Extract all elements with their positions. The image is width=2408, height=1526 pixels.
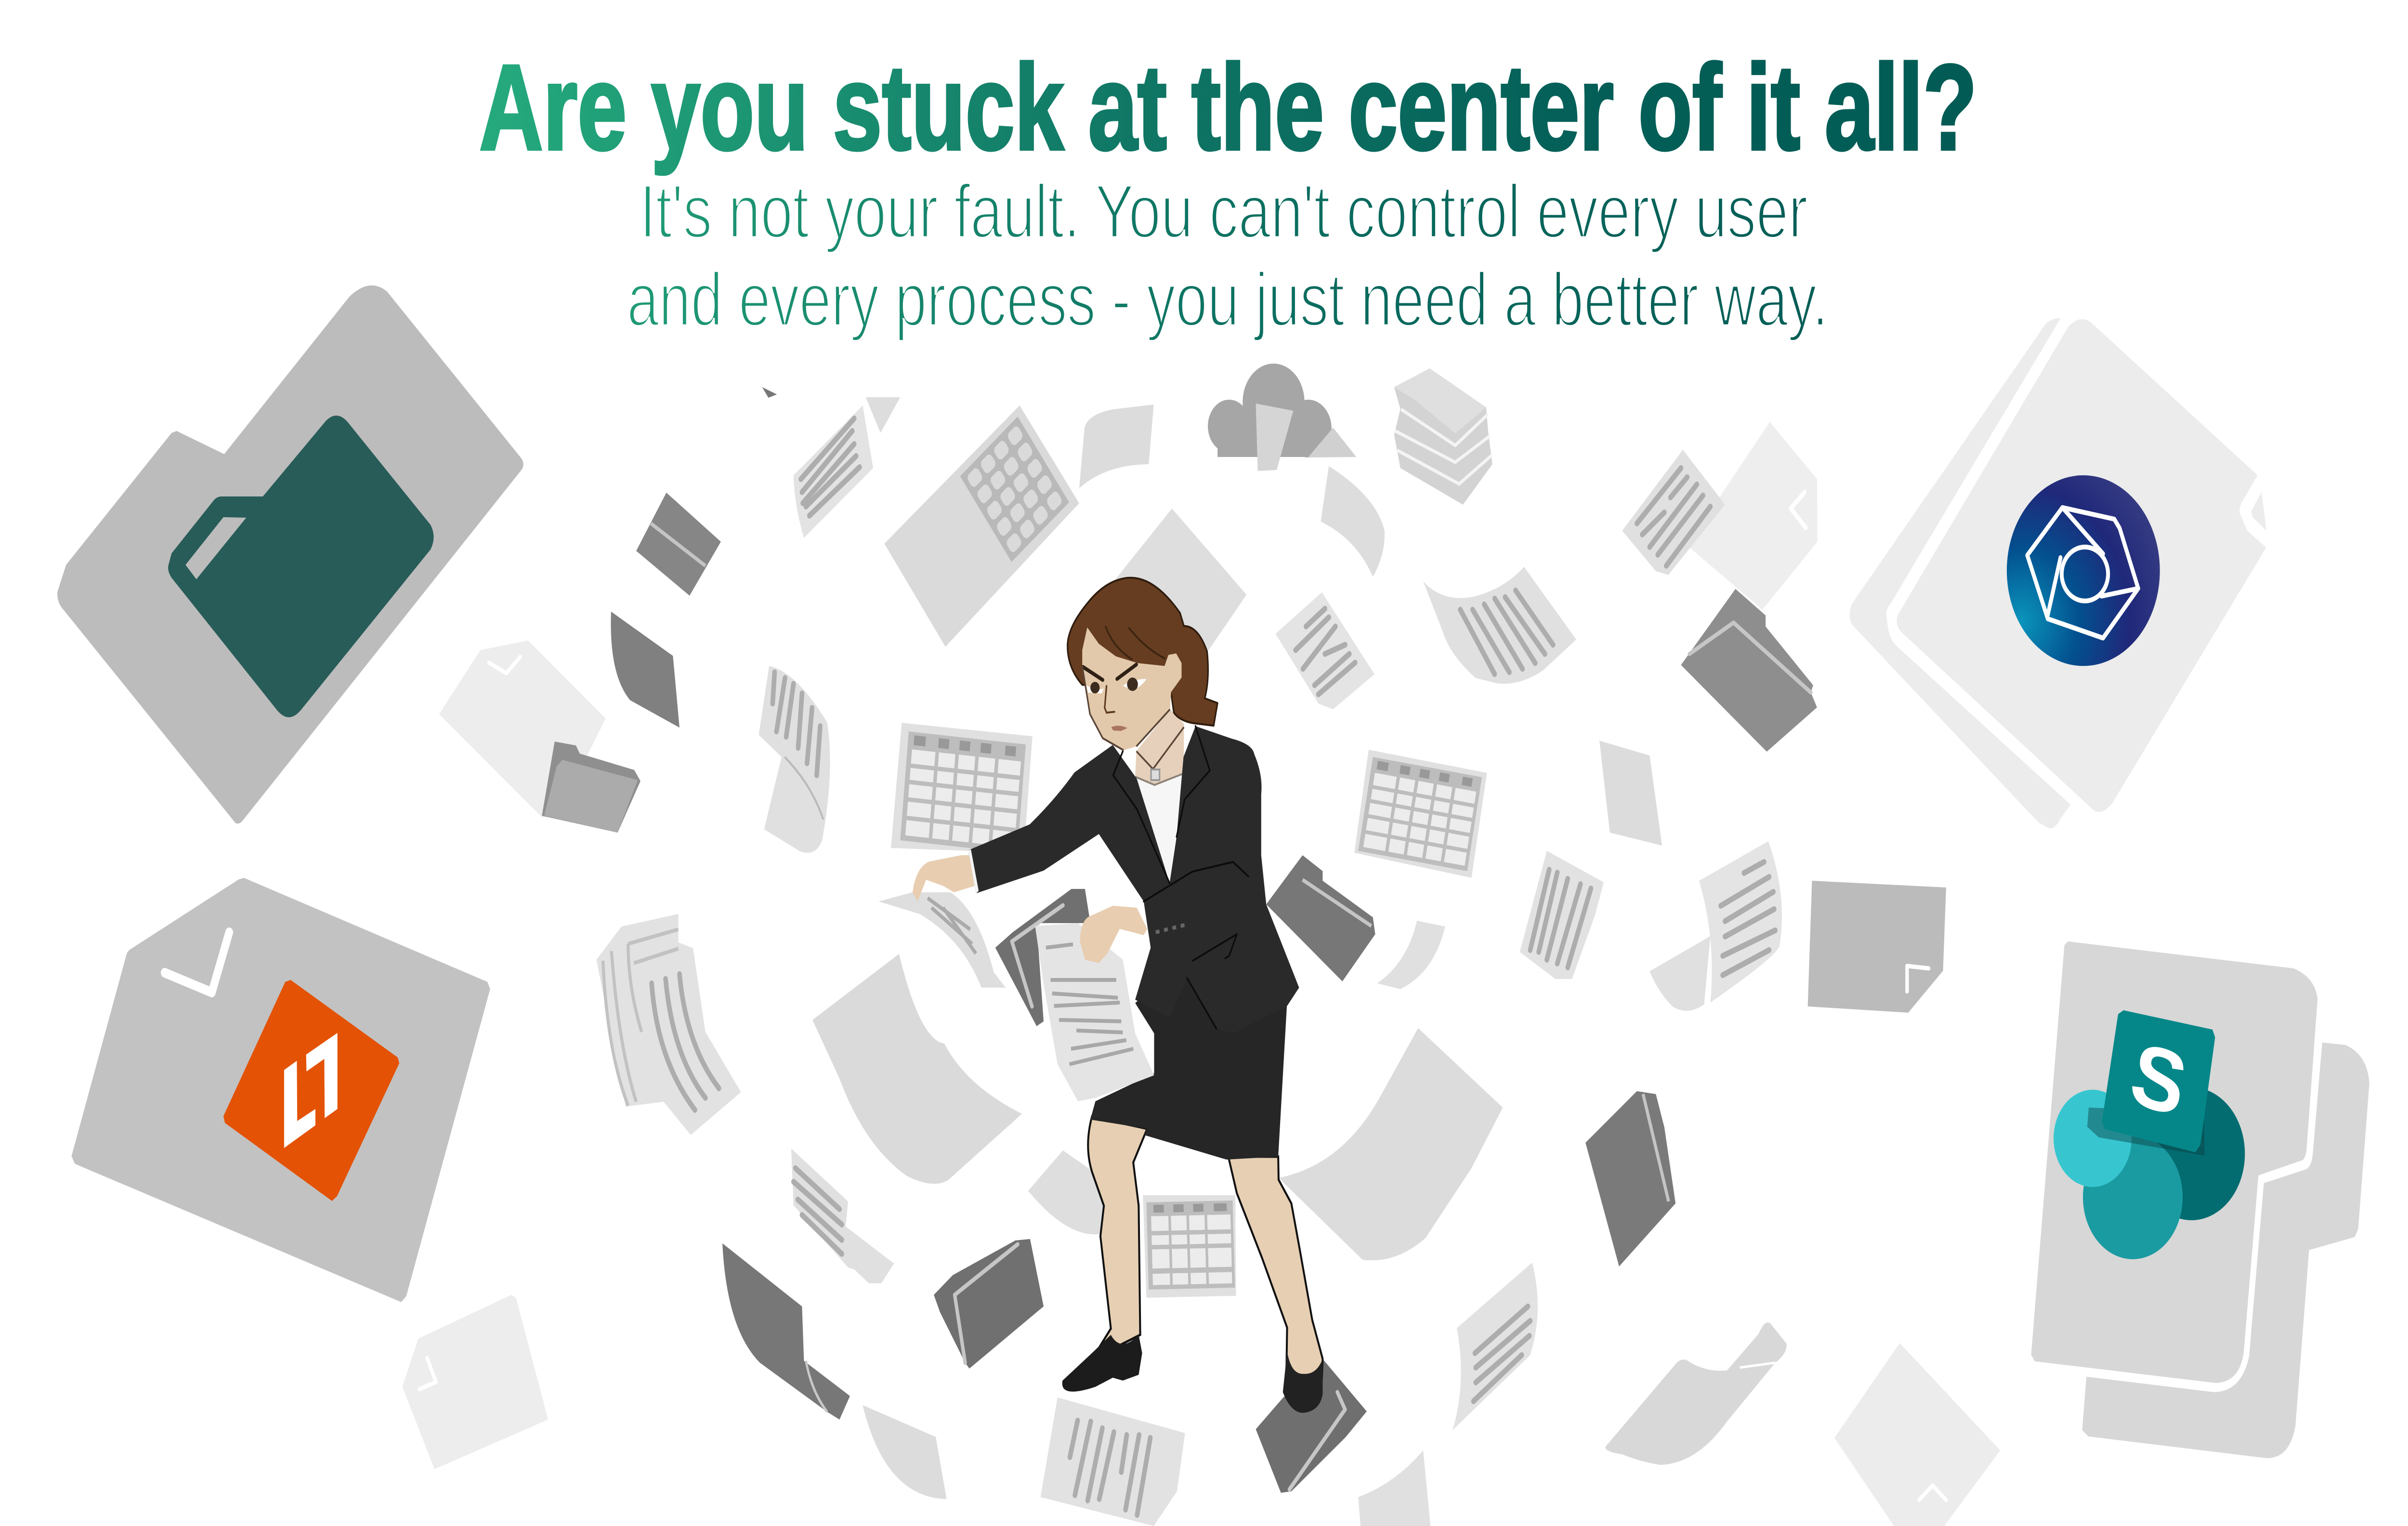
character: shoes <box>1062 1335 1322 1413</box>
swirl: text document near head <box>1275 592 1374 709</box>
character: legs <box>1088 1117 1322 1378</box>
swirl: twisted blank sheet <box>1606 1322 1787 1465</box>
swirl: curved blank sheet <box>1079 404 1154 488</box>
swirl: blank sheet bottom <box>1358 1450 1430 1526</box>
swirl: faded document lower right <box>1834 1343 2000 1526</box>
character: head and hair <box>1068 578 1217 750</box>
swirl: small blank sheet <box>1377 921 1445 989</box>
swirl: text document bottom <box>1041 1397 1185 1526</box>
swirl: small dark triangle and corner scraps <box>762 387 900 433</box>
swirl: calendar left <box>891 723 1033 853</box>
swirl: narrow text document right <box>1520 851 1604 979</box>
faded document with small folder <box>439 640 641 833</box>
character: woman in black suit <box>913 578 1322 1413</box>
swirl: dark folder behind jacket <box>1266 855 1375 981</box>
swirl: text document top <box>794 405 873 538</box>
subtitle: and every process - you just need a better way. <box>627 258 1828 342</box>
subtitle: It's not your fault. You can't control every user <box>640 170 1808 254</box>
swirl: dark folder lower right <box>1585 1091 1675 1266</box>
swirl: blank sheet lower left <box>863 1405 946 1499</box>
swirl: dark curved sheet lower left <box>722 1243 850 1420</box>
swirl: paper held by outstretched hand <box>878 892 1006 988</box>
title: Are you stuck at the center of it all? <box>479 40 1977 175</box>
swirl: calendar right <box>1354 750 1487 878</box>
swirl: curled text document right <box>1649 841 1782 1011</box>
swirl: dark folder lower left <box>934 1239 1044 1369</box>
swirl: large blank sheet right of legs <box>1279 1028 1503 1260</box>
sharepoint document group: S <box>2123 1023 2194 1136</box>
swirl: calendar below skirt <box>1143 1195 1236 1298</box>
swirl: curled text document lower right <box>1453 1263 1538 1430</box>
sharepoint document group <box>2031 941 2369 1458</box>
character: neck and necklace <box>1135 709 1184 883</box>
swirl: dark folder under foot <box>1256 1359 1367 1493</box>
swirl: curled text document lower left <box>791 1148 894 1283</box>
document icon with orange logo <box>71 878 490 1302</box>
swirl: curling document left <box>759 666 830 853</box>
swirl: blank sheet near knee <box>1028 1150 1125 1234</box>
swirl: dark folder upper right <box>1681 589 1817 752</box>
swirl: faded document right <box>1687 422 1818 610</box>
swirl: paper stack <box>1394 368 1492 505</box>
swirl: dark folder behind hands <box>995 889 1090 1026</box>
swirl: dark folder back <box>636 493 721 596</box>
character: hands <box>913 855 1147 963</box>
swirl: curved text document <box>1423 567 1576 684</box>
product document with blue logo <box>1850 318 2266 828</box>
swirl: blank sheet right <box>1599 741 1662 846</box>
character: skirt <box>1090 958 1287 1160</box>
swirl: cloud icon <box>1208 364 1356 471</box>
swirl: curved blank sheet upper right <box>1321 466 1385 577</box>
subtitle <box>627 170 1828 342</box>
swirl: big blank sheet left <box>812 954 1022 1184</box>
faded document bottom left <box>402 1295 548 1469</box>
swirl: text document upper right <box>1622 450 1725 575</box>
swirl: large sheet with grid <box>884 405 1079 647</box>
paper held in right hand <box>1035 923 1154 1101</box>
swirl: large sheet behind head <box>1116 509 1246 660</box>
swirl: dark curved sheet <box>611 612 680 728</box>
swirl: stacked text documents left <box>596 914 741 1135</box>
big folder icon with dark green folder <box>57 286 523 823</box>
swirl: grey note with folded corner <box>1808 881 1946 1013</box>
character: jacket <box>968 726 1299 1033</box>
